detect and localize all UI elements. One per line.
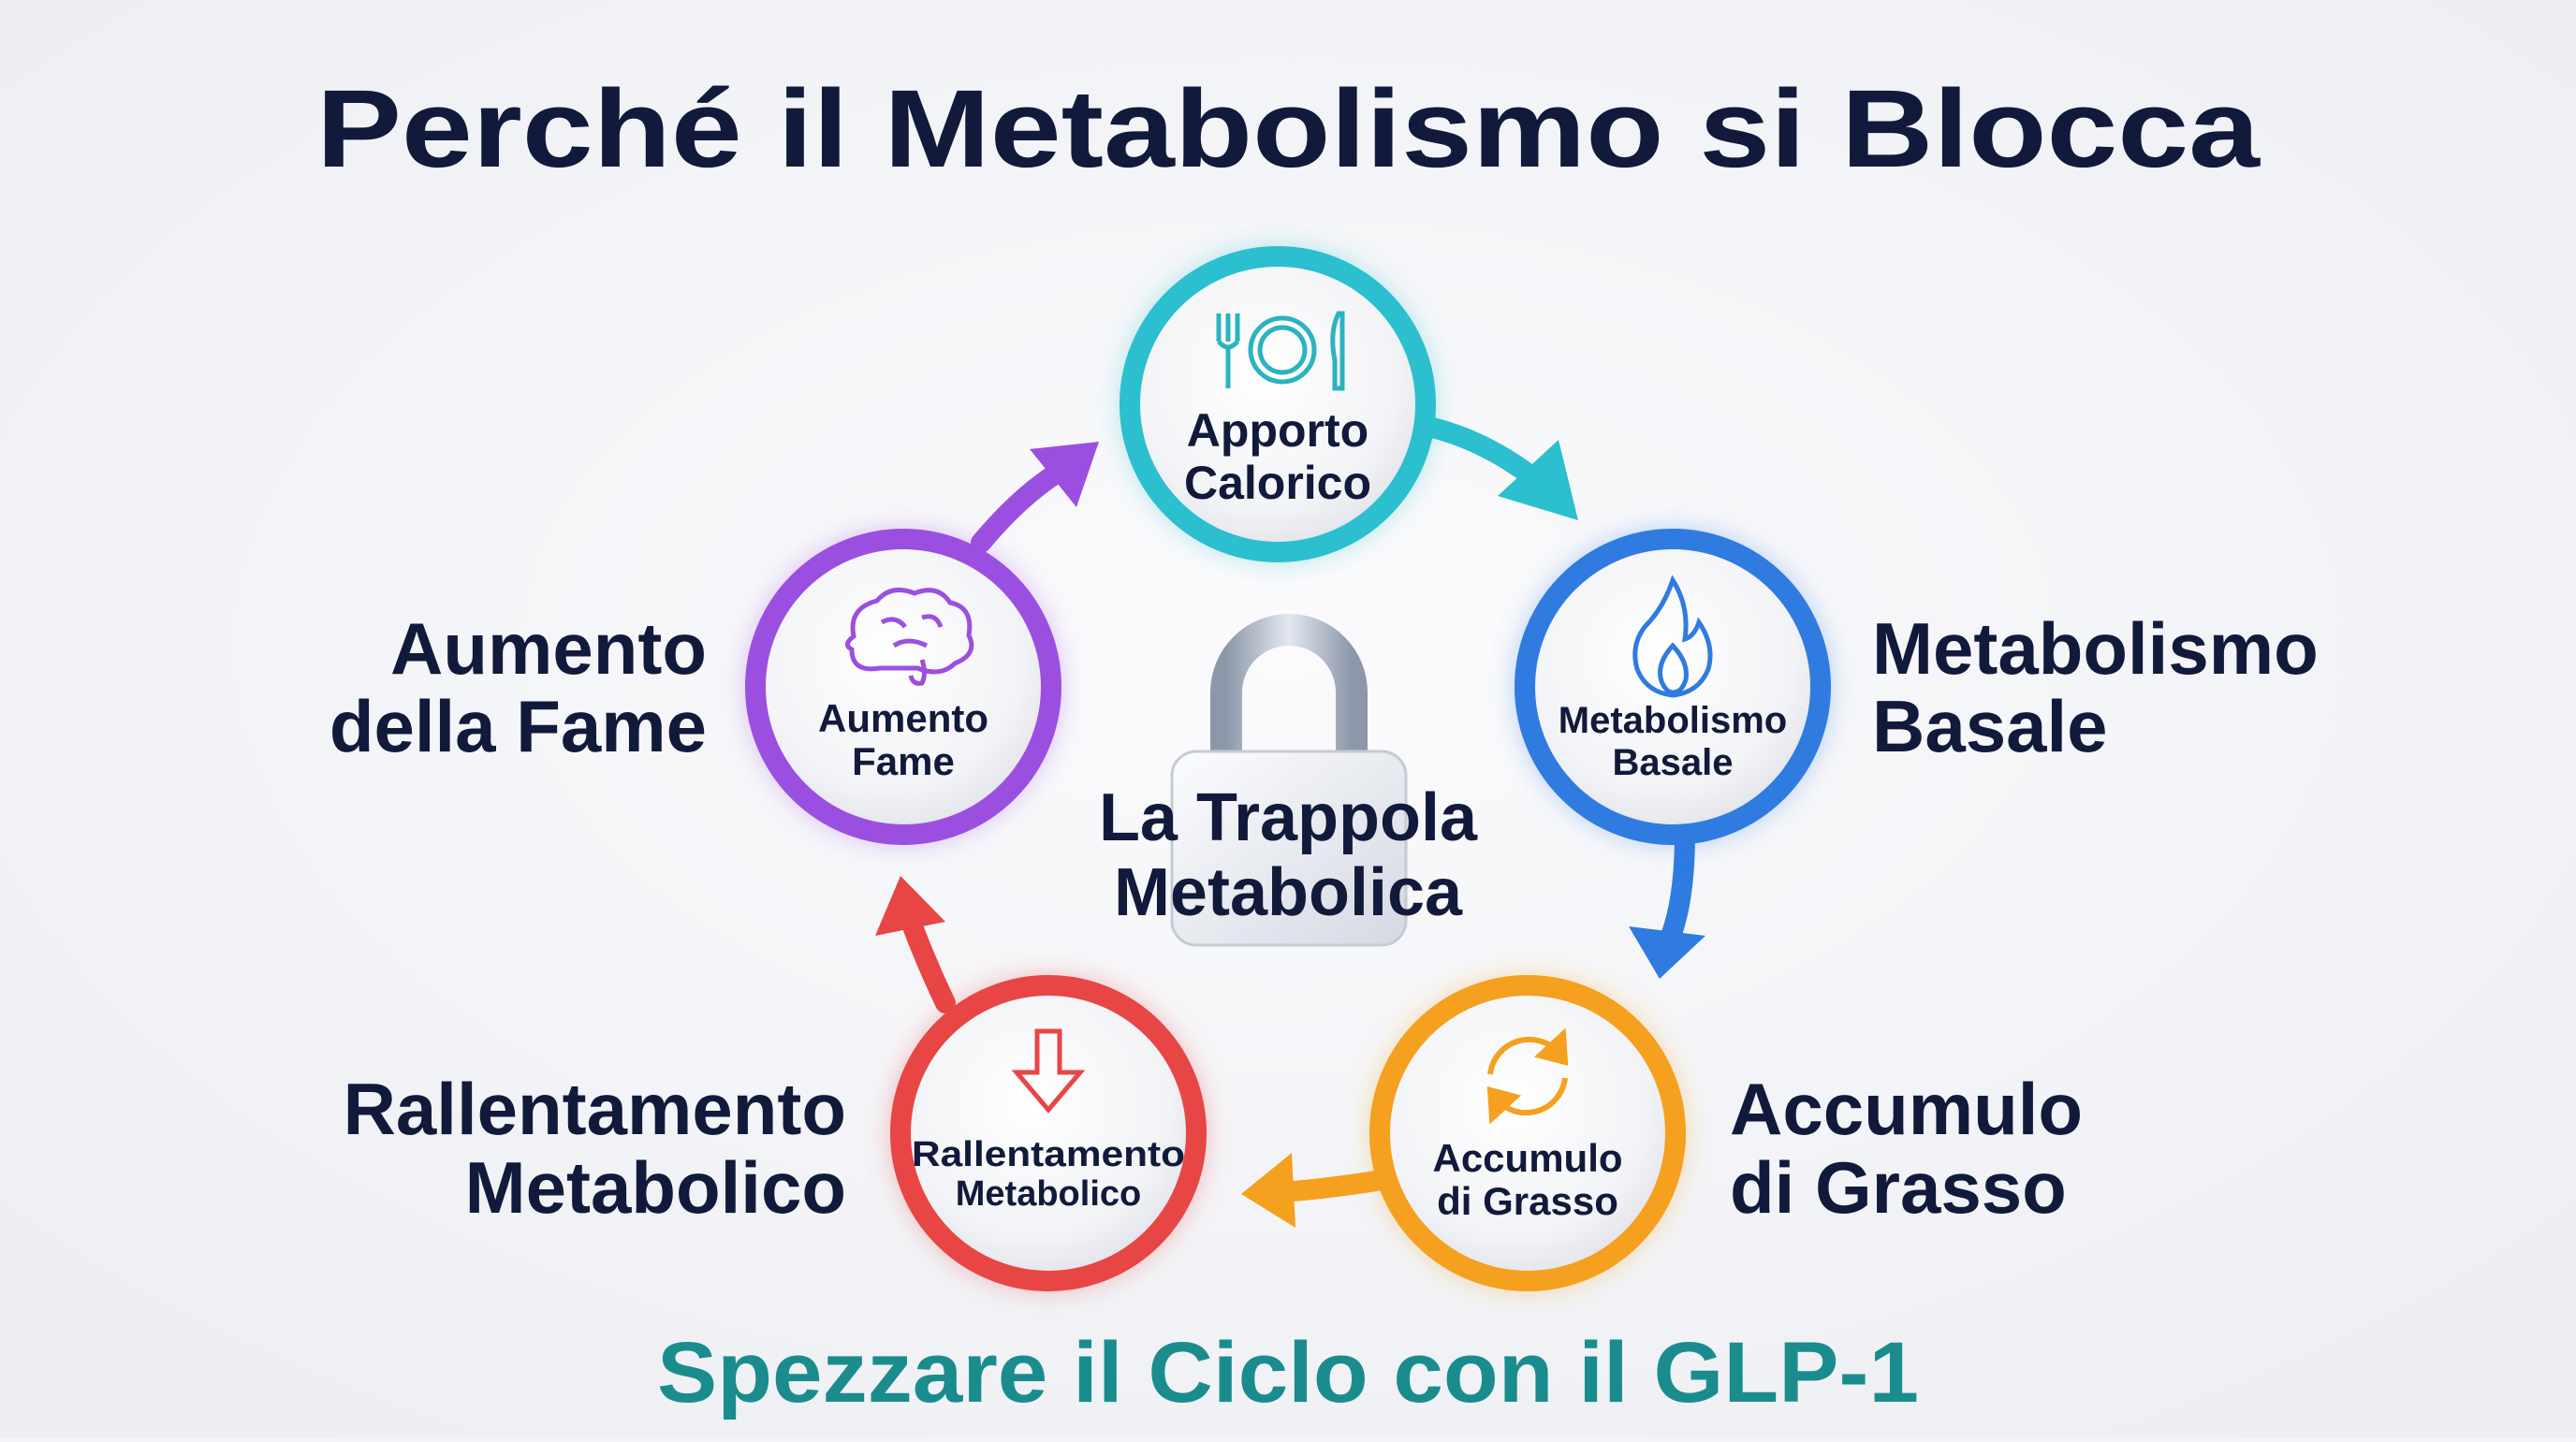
label: Accumulo di Grasso: [1730, 1068, 2083, 1229]
circle: Apporto Calorico: Apporto: [1187, 404, 1368, 457]
label: Metabolismo Basale: Basale: [1872, 685, 2108, 767]
label: Metabolismo Basale: [1872, 607, 2319, 767]
label: Aumento della Fame: Aumento: [390, 607, 707, 690]
label: Rallentamento Metabolico: Rallentamento: [344, 1068, 846, 1150]
circle: Metabolismo Basale: Basale: [1613, 742, 1733, 783]
circle: Accumulo di Grasso: Accumulo: [1432, 1136, 1623, 1180]
circle: Rallentamento Metabolico: Metabolico: [956, 1174, 1141, 1214]
icon: padlock: [1172, 630, 1406, 945]
circle: Accumulo di Grasso: [1370, 976, 1685, 1290]
icon: plate and cutlery: [1219, 313, 1342, 388]
title: Perché il Metabolismo si Blocca: [316, 67, 2261, 191]
circle: Aumento Fame: Aumento: [818, 696, 988, 740]
footer heading: Spezzare il Ciclo con il GLP-1: [657, 1325, 1919, 1420]
arrow: purple: [981, 442, 1099, 543]
circle: Metabolismo Basale: [1515, 530, 1830, 844]
icon: cycle arrows: [1490, 1034, 1565, 1118]
arrow: teal: [1425, 426, 1578, 520]
label: Accumulo di Grasso: di Grasso: [1730, 1146, 2067, 1229]
arrow: red: [875, 876, 945, 1003]
circle: Aumento Fame: Fame: [852, 739, 955, 783]
icon: down arrow: [1017, 1031, 1080, 1110]
label: Accumulo di Grasso: Accumulo: [1730, 1068, 2083, 1150]
arrow: blue: [1629, 833, 1705, 979]
label: Metabolismo Basale: Metabolismo: [1872, 607, 2319, 690]
circle: Accumulo di Grasso: di Grasso: [1437, 1179, 1618, 1223]
arrow: orange: [1241, 1153, 1376, 1228]
center label: Metabolica: [1114, 855, 1463, 930]
label: Aumento della Fame: della Fame: [329, 685, 707, 767]
circle: Rallentamento Metabolico: [891, 976, 1206, 1290]
label: Aumento della Fame: [329, 607, 707, 767]
label: Rallentamento Metabolico: [344, 1068, 846, 1229]
circle: Apporto Calorico: Calorico: [1184, 457, 1371, 509]
circle: Metabolismo Basale: Metabolismo: [1559, 700, 1787, 741]
icon: brain: [847, 590, 972, 683]
label: Rallentamento Metabolico: Metabolico: [465, 1146, 846, 1229]
center label: [1099, 780, 1478, 930]
circle: Apporto Calorico: [1120, 247, 1435, 561]
center label: La Trappola: [1099, 780, 1478, 855]
circle: Aumento Fame: [746, 530, 1061, 844]
circle: Rallentamento Metabolico: Rallentamento: [912, 1135, 1185, 1174]
icon: flame: [1635, 580, 1710, 695]
